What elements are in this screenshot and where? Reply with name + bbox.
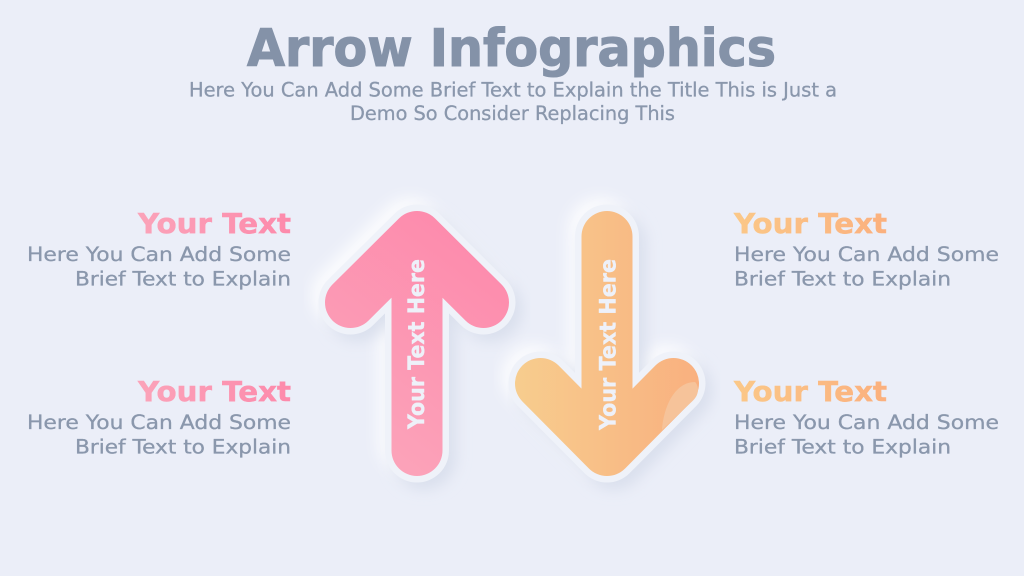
up arrow label: Your Text Here [405,259,430,430]
text block: bottom left: Here You Can Add Some [27,411,291,434]
text block: bottom right: Your Text [733,375,887,408]
text block: top right: Here You Can Add Some [734,243,999,266]
title: Arrow Infographics [247,19,776,79]
text block: top right [733,207,999,290]
text block: top right: Your Text [733,207,887,240]
down arrow highlight [662,382,698,430]
down arrow [534,230,698,458]
subtitle [189,78,837,125]
text block: bottom left: Brief Text to Explain [75,436,291,458]
text block: top left: Here You Can Add Some [27,243,291,266]
text block: bottom right: Brief Text to Explain [734,436,951,458]
text block: bottom right: Here You Can Add Some [734,411,999,434]
text block: top left [27,207,291,290]
text block: bottom right [733,375,999,458]
text block: bottom left [27,375,291,458]
down arrow label: Your Text Here [596,259,622,431]
up arrow [344,230,490,458]
subtitle: Here You Can Add Some Brief Text to Explain the Title This is Just a [189,78,837,102]
text block: top right: Brief Text to Explain [734,268,951,290]
text block: bottom left: Your Text [137,375,291,408]
text block: top left: Brief Text to Explain [75,268,291,290]
text block: top left: Your Text [137,207,291,240]
subtitle: Demo So Consider Replacing This [350,102,675,125]
